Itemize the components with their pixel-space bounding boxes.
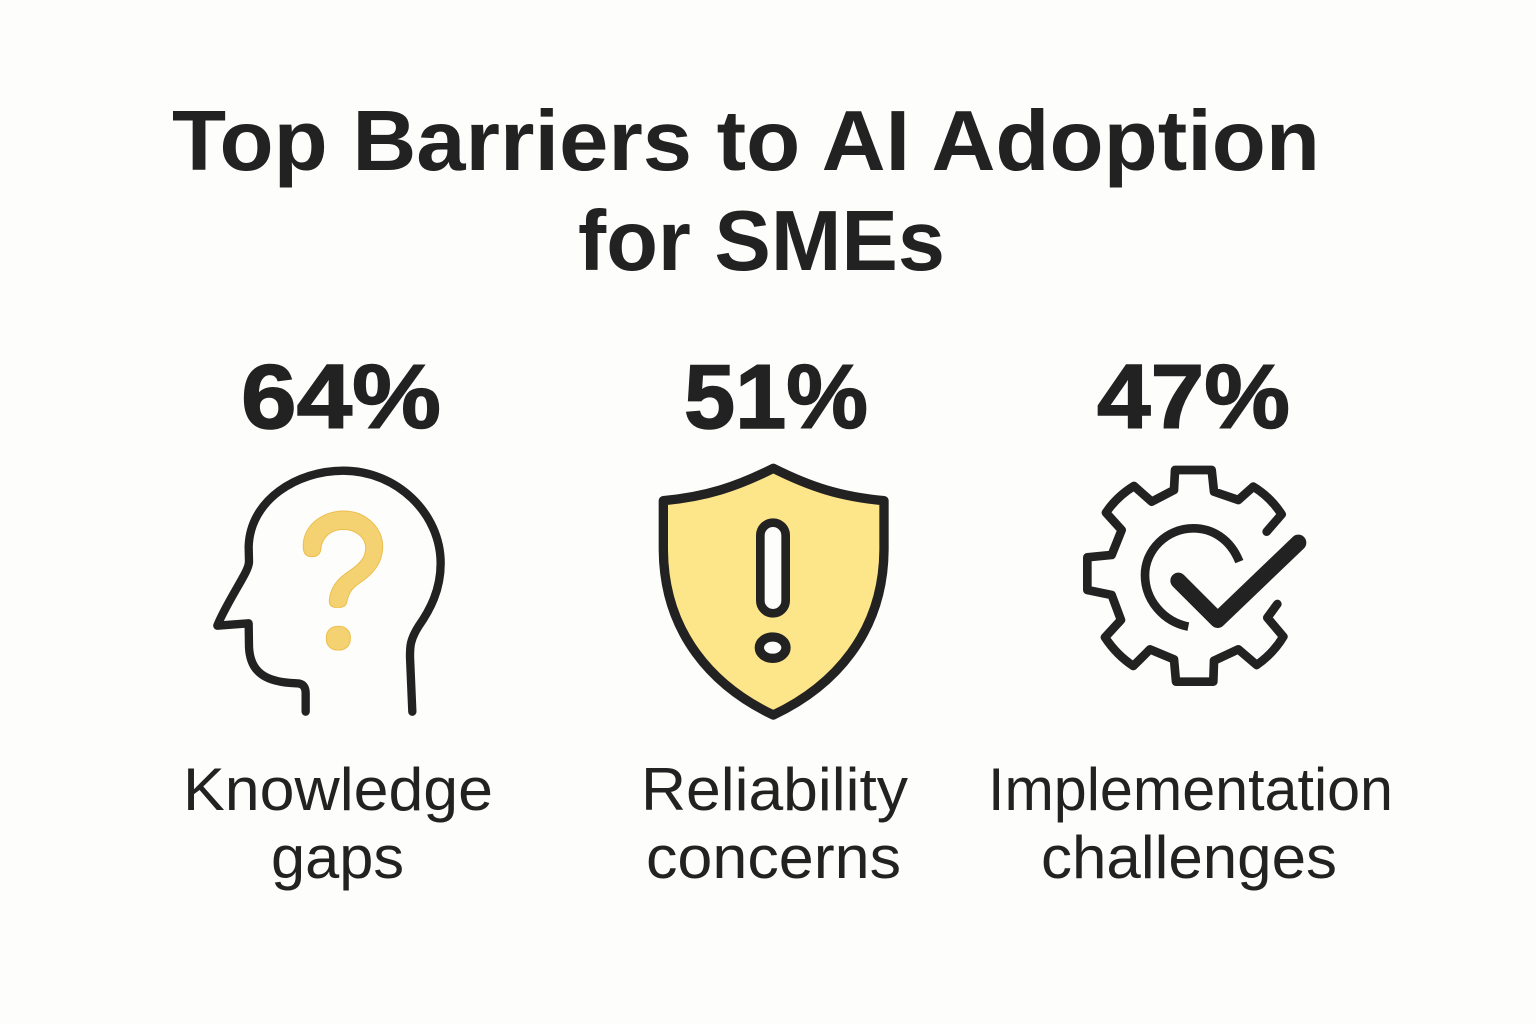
title <box>172 94 1320 289</box>
stat: 47%: 47% <box>1097 347 1290 448</box>
label: Implementation challenges <box>988 756 1393 891</box>
icon: gear with check mark <box>1087 470 1298 682</box>
label: Knowledge gaps: Knowledge <box>183 756 493 823</box>
title: Top Barriers to AI Adoption <box>172 94 1320 189</box>
label: Knowledge gaps <box>183 756 493 891</box>
label: Reliability concerns: concerns <box>646 824 901 891</box>
label: Implementation challenges: challenges <box>1041 824 1337 891</box>
icon: head with question mark <box>217 471 441 712</box>
title: for SMEs <box>578 194 945 289</box>
label: Implementation challenges: Implementation <box>988 756 1393 823</box>
label: Knowledge gaps: gaps <box>271 824 404 891</box>
icon: warning shield <box>663 468 884 715</box>
label: Reliability concerns <box>641 756 908 891</box>
stat: 51%: 51% <box>684 347 868 448</box>
stat: 64%: 64% <box>241 347 441 448</box>
label: Reliability concerns: Reliability <box>641 756 908 823</box>
